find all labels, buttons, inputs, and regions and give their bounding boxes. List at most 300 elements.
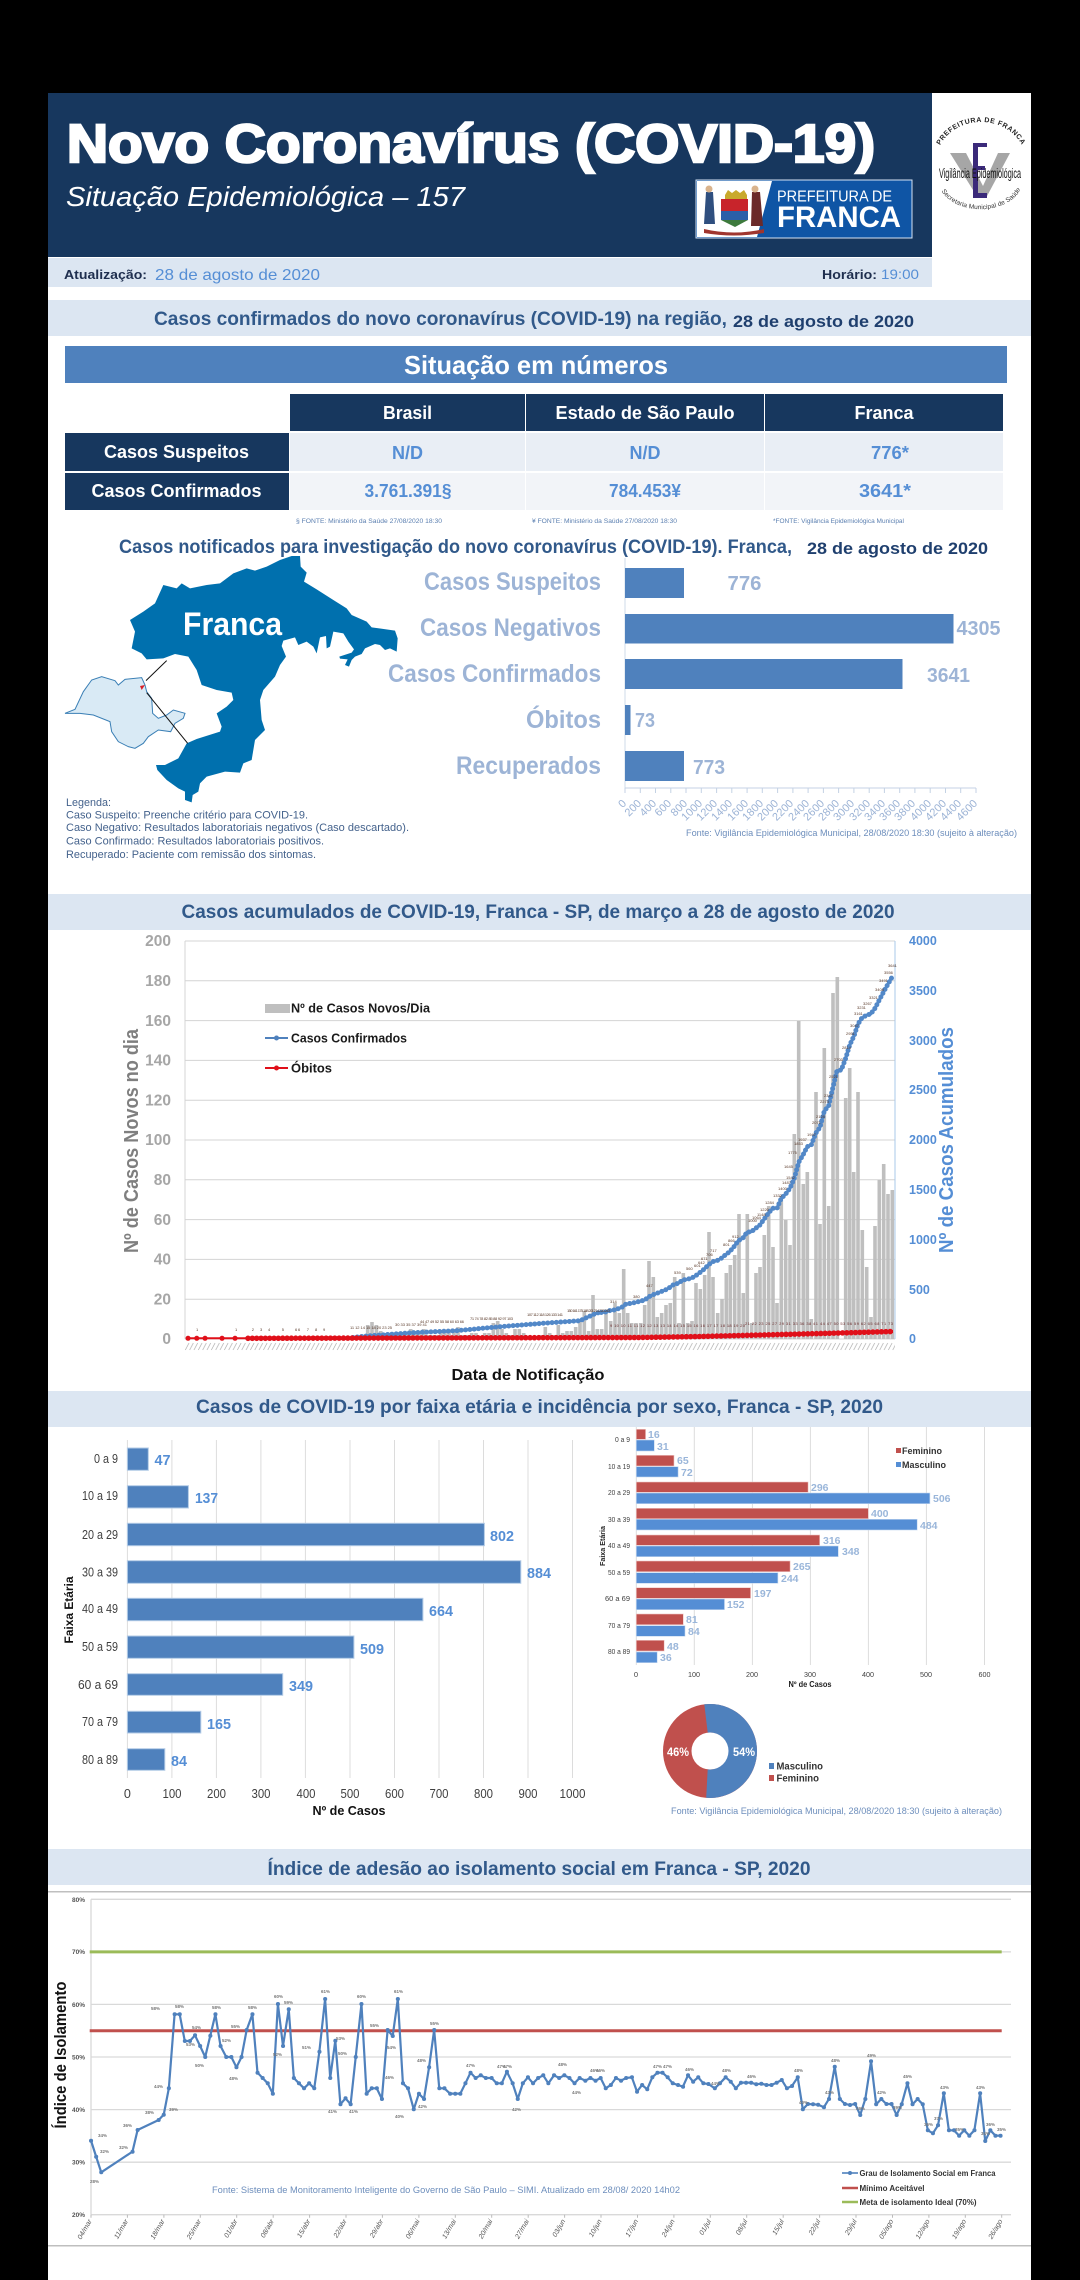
axis tick labels: 3600 [877,798,903,823]
logo: Prefeitura de Franca [696,180,912,238]
point labels: 39% [856,2106,865,2111]
x axis ticks: 500 [340,1787,360,1801]
point labels: 866 [728,1238,735,1243]
section heading: casos confirmados na região: 28 de agosto de 2020 [733,312,914,331]
x axis ticks: 800 [474,1787,493,1801]
table: situação em números: Casos Suspeitos [104,442,249,462]
section heading: isolamento social [48,1849,1031,1885]
value labels: 16 [648,1429,660,1441]
x axis date labels: 26/ago [987,2218,1004,2241]
y axis labels: 50% [72,2054,85,2062]
bar chart: casos notificados: 776 [728,573,762,595]
value labels: 36 [660,1652,672,1664]
x axis ticks: 0 [124,1787,131,1801]
point labels: 1400 [778,1186,788,1191]
left axis labels: 60 [154,1212,171,1229]
point labels [90,1989,1006,2184]
point labels: 55% [231,2024,240,2029]
table: situação em números: Brasil [383,403,432,423]
point labels: 3231 [857,1005,867,1010]
x-axis date labels [185,1342,895,1351]
value labels: 484 [920,1520,938,1532]
point labels: 47% [663,2064,672,2069]
table: situação em números: Estado de São Paulo [556,403,734,423]
chart legend: Óbitos [291,1060,332,1076]
bar chart: casos notificados: Óbitos [526,704,601,734]
axis tick labels: 1200 [694,798,720,823]
point labels: 58% [151,2006,160,2011]
donut legend: Masculino [776,1762,823,1772]
y axis labels [72,1897,85,2219]
value labels: 400 [871,1508,889,1520]
bar chart: casos notificados: Casos Negativos [420,614,601,642]
x axis date labels: 27/mai [514,2218,531,2241]
point labels: 642 [698,1260,705,1265]
right axis labels: 4000 [909,934,937,948]
table: situação em números: N/D [630,443,660,463]
point labels: 539 [674,1270,681,1275]
point labels: 71 74 78 82 85 88 92 97 103 [470,1316,514,1321]
left axis labels: 40 [154,1252,171,1268]
x axis ticks: 400 [862,1670,874,1679]
legend [896,1446,946,1470]
point labels: 3641 [888,963,898,968]
point labels: 44% [711,2081,720,2086]
right axis labels: 2000 [909,1133,937,1147]
point labels: 52% [273,2052,282,2057]
value labels: 81 [686,1614,698,1626]
point labels: 44% [154,2084,163,2089]
axis tick labels: 200 [623,798,644,819]
donut chart: incidência por sexo: 54% [733,1747,755,1759]
x axis date labels: 11/mar [113,2218,130,2240]
axis tick labels: 3800 [892,798,918,823]
point labels: 52% [222,2038,231,2043]
left axis labels: 160 [145,1013,171,1030]
point labels: 9 10 10 11 11 12 12 13 13 14 14 15 15 16 16 17 17 18 18 19 20 [610,1323,746,1328]
point labels: 601 [694,1263,701,1268]
x axis ticks: 700 [430,1787,449,1801]
category labels: 60 a 69 [78,1678,118,1692]
axis tick labels: 0 [616,798,629,810]
point labels: 44 47 49 52 55 58 60 63 66 [420,1319,465,1324]
category labels: 20 a 29 [608,1488,630,1497]
point labels: 36% [924,2122,933,2127]
point labels: 11 12 14 15 18 20 23 25 [350,1325,393,1330]
point labels: 2347 [824,1093,834,1098]
right axis labels: 1000 [909,1233,937,1247]
point labels: 3408 [875,987,885,992]
combo chart: casos acumulados [121,933,958,1384]
point labels: 43% [825,2090,834,2095]
x axis ticks: 100 [162,1787,182,1801]
category labels: 40 a 49 [82,1602,118,1616]
point labels: 560 [686,1266,693,1271]
section heading: casos acumulados [48,894,1031,930]
point labels: 1284 [765,1200,775,1205]
x axis date labels: 05/ago [878,2218,895,2241]
table sources: ¥ FONTE: Ministério da Saúde 27/08/2020 18:30 [532,518,677,525]
right axis labels: 2500 [909,1083,937,1097]
section heading: faixa etária: Casos de COVID-19 por faixa etária e incidência por sexo, Franca - SP, 2020 [196,1397,883,1418]
left axis labels: 180 [145,973,171,990]
point labels: 30 33 35 37 39 41 [395,1322,428,1327]
category labels: 20 a 29 [82,1528,118,1542]
update strip: Atualização: [64,267,147,282]
x axis date labels: 08/abr [260,2218,276,2239]
x axis date labels: 13/mai [441,2218,458,2240]
line: meta ideal 70% [90,1950,1002,1953]
point labels: 3321 [869,995,879,1000]
point labels: 48% [722,2068,731,2073]
value labels: 884 [527,1565,552,1582]
y axis labels: 60% [72,2002,85,2009]
point labels: 55% [370,2023,379,2028]
chart legend: Grau de Isolamento Social em Franca [860,2169,996,2178]
x axis date labels: 29/abr [369,2218,385,2240]
x axis ticks: 300 [804,1670,816,1679]
donut legend: Feminino [776,1774,819,1784]
point labels: 47% [497,2064,506,2069]
x axis ticks: 200 [207,1787,226,1801]
point labels: 2071 [812,1120,822,1125]
point labels: 1000 [748,1218,758,1223]
bar chart: casos notificados: Recuperados [456,752,601,780]
value labels: 165 [207,1716,231,1733]
value labels: 48 [667,1641,679,1653]
table: situação em números: 776* [871,443,909,463]
point labels: 8 [315,1327,318,1332]
heading bar: Situação em números: Situação em números [404,350,668,380]
point labels: 717 [710,1248,717,1253]
point labels: 5 [282,1327,285,1332]
section heading: casos notificados: 28 de agosto de 2020 [807,539,988,558]
point labels: 39% [893,2105,902,2110]
point labels: 1487 [782,1180,792,1185]
x axis date labels: 01/abr [223,2218,240,2239]
update strip: 19:00 [881,266,919,282]
point labels: 28% [90,2179,99,2184]
x axis date labels [77,2218,1004,2242]
point labels: 40% [799,2100,808,2105]
left axis labels: 20 [154,1292,171,1308]
point labels: 48% [417,2058,426,2063]
x axis date labels: 08/jul [735,2218,750,2236]
point labels: 1064 [752,1215,762,1220]
point labels: 2 [252,1327,255,1332]
bar chart: casos notificados: 3641 [927,665,970,687]
value labels: 84 [688,1626,700,1638]
axis tick labels: 800 [669,798,690,819]
point labels: 47% [503,2064,512,2069]
point labels: 4 [268,1327,271,1332]
subtitle: Situação Epidemiológica – 157 [66,181,466,212]
point labels: 48% [229,2076,238,2081]
legend text: Caso Confirmado: Resultados laboratoriais positivos. [66,836,324,848]
x axis title: Nº de Casos [312,1803,386,1818]
x axis ticks: 0 [634,1670,638,1679]
point labels: 51% [302,2045,311,2050]
chart legend: Meta de isolamento Ideal (70%) [860,2198,977,2207]
point labels: 7 [307,1327,310,1332]
table sources: § FONTE: Ministério da Saúde 27/08/2020 18:30 [296,518,442,525]
point labels: 1937 [798,1137,808,1142]
value labels: 47 [154,1452,170,1469]
value labels: 664 [429,1603,454,1620]
heading bar: Situação em números [65,346,1007,383]
x axis date labels: 29/jul [844,2218,859,2237]
x axis ticks: 1000 [560,1787,586,1801]
point labels: 43% [940,2085,949,2090]
donut chart: incidência por sexo: 46% [667,1747,689,1759]
chart legend: Mínimo Aceitável [860,2184,924,2193]
bars: casos novos por dia [368,977,892,1339]
right axis title: Nº de Casos Acumulados [936,1027,958,1253]
chart legend [265,1000,431,1076]
value labels: 316 [823,1535,841,1547]
point labels: 706 [706,1252,713,1257]
point labels: 35% [997,2127,1006,2132]
value labels: 72 [681,1467,693,1479]
value labels: 348 [842,1546,860,1558]
value labels: 506 [933,1493,951,1505]
chart legend [842,2169,996,2207]
legend: Feminino [902,1446,943,1456]
category labels: 50 a 59 [82,1640,118,1654]
point labels: 150 161 175 188 201 214 228 243 [567,1308,611,1313]
bar chart: casos notificados: 773 [693,757,725,779]
point labels: 1775 [788,1150,798,1155]
point labels: 54% [387,2045,396,2050]
point labels: 3161 [854,1011,864,1016]
right axis labels: 1500 [909,1183,937,1197]
logo: Prefeitura de Franca: PREFEITURA DE [777,188,892,206]
left axis labels: 80 [154,1172,171,1189]
point labels: 48% [794,2068,803,2073]
point labels: 671 [701,1256,708,1261]
point labels: 46% [747,2074,756,2079]
table: situação em números: N/D [392,443,423,463]
point labels: 42% [512,2107,521,2112]
point labels: 50% [338,2051,347,2056]
axis tick labels: 3200 [847,798,873,823]
title: Novo Coronavírus (COVID-19) [67,114,875,174]
logo: Prefeitura de Franca: FRANCA [777,201,901,234]
x axis ticks: 200 [746,1670,758,1679]
x axis date labels: 19/ago [951,2218,968,2241]
point labels: 61% [394,1989,403,1994]
point labels: 47% [653,2064,662,2069]
category labels: 10 a 19 [608,1462,630,1471]
legend text: Legenda: [66,797,111,809]
x axis date labels: 12/ago [915,2218,932,2241]
point labels: 2703 [834,1057,844,1062]
x axis date labels: 17/jun [625,2218,640,2239]
point labels: 447 [646,1283,653,1288]
point labels: 58% [175,2004,184,2009]
axis tick labels: 3000 [831,798,857,823]
point labels: 48% [831,2058,840,2063]
point labels: 2951 [846,1031,856,1036]
axis tick labels: 4000 [908,798,934,823]
value labels: 137 [195,1490,218,1507]
point labels: 37% [934,2116,943,2121]
point labels: 107 112 118 126 133 141 [527,1312,564,1317]
x axis ticks: 600 [385,1787,404,1801]
point labels: 35% [955,2127,964,2132]
value labels: 84 [171,1753,188,1770]
left axis labels: 140 [145,1052,171,1070]
point labels: 48% [558,2062,567,2067]
y axis labels: 70% [72,1949,85,1956]
point labels: 1542 [786,1175,796,1180]
line chart: isolamento social [48,1892,1031,2246]
axis tick labels: 400 [638,798,659,819]
table: situação em números: Franca [854,403,914,423]
right axis labels [909,934,937,1346]
point labels: 42% [418,2104,427,2109]
point labels: 2814 [842,1045,852,1050]
category labels: 30 a 39 [608,1515,630,1524]
point labels: 1645 [784,1164,794,1169]
point labels: 1947 [807,1132,817,1137]
right axis labels: 500 [909,1283,930,1297]
table: situação em números: 3641* [859,481,911,501]
chart legend: Nº de Casos Novos/Dia [291,1000,431,1016]
x axis title: Data de Notificação [452,1367,605,1384]
category labels: 10 a 19 [82,1489,118,1503]
left axis labels: 200 [145,933,171,950]
bar chart: casos notificados: 4305 [956,618,1000,640]
axis tick labels: 600 [653,798,674,819]
chart legend: Casos Confirmados [291,1030,407,1046]
legend text: Recuperado: Paciente com remissão dos sintomas. [66,849,316,861]
x axis date labels: 18/mar [150,2218,167,2241]
update strip [48,258,932,287]
value labels: 265 [793,1561,811,1573]
point labels: 54% [192,2025,201,2030]
bar chart: casos notificados: 73 [635,710,655,732]
table sources [296,518,905,525]
x axis ticks: 600 [978,1670,990,1679]
value labels: 197 [754,1588,772,1600]
axis tick labels: 2400 [786,798,812,823]
x axis date labels: 10/jun [588,2218,604,2239]
table: situação em números: 3.761.391§ [364,481,452,501]
category labels: 50 a 59 [608,1568,630,1577]
category labels [605,1435,630,1656]
category labels: 70 a 79 [82,1715,118,1729]
x axis date labels: 22/abr [332,2218,349,2240]
legend: Masculino [902,1460,946,1470]
value labels: 152 [727,1599,745,1611]
point labels: 380 [633,1294,640,1299]
axis tick labels: 1400 [709,798,735,823]
logo: Vigilância Epidemiológica: PREFEITURA DE FRANCA [936,117,1025,145]
bar chart: casos notificados [388,558,1000,823]
point labels: 58% [212,2005,221,2010]
axis tick labels: 3400 [862,798,888,823]
y axis labels: 30% [72,2160,85,2166]
point labels: 44% [572,2090,581,2095]
x axis date labels: 22/jul [807,2218,823,2237]
left axis title: Nº de Casos Novos no dia [121,1028,143,1253]
axis tick labels: 1000 [679,798,705,823]
axis tick labels: 2000 [755,798,781,823]
left axis labels: 100 [145,1132,171,1149]
map: Franca and São Paulo state: Franca [183,606,282,642]
x axis date labels: 01/jul [699,2218,713,2236]
point labels: 49% [867,2053,876,2058]
point labels: 1332 [773,1193,783,1198]
x axis ticks: 300 [252,1787,271,1801]
point labels: 45% [903,2074,912,2079]
y axis title: Faixa Etária [598,1525,607,1566]
point labels: 32% [119,2145,128,2150]
bar chart: faixa etária por sexo [598,1427,990,1689]
point labels: 61% [321,1989,330,1994]
x axis date labels: 15/abr [296,2218,313,2239]
point labels: 34% [981,2131,990,2136]
value labels [648,1429,951,1664]
map: Franca and São Paulo state [65,556,398,802]
section heading: faixa etária [48,1391,1031,1427]
point labels: 801 [723,1242,730,1247]
legend text [66,797,409,861]
point labels: 1 [235,1327,238,1332]
bar chart: casos notificados: Casos Confirmados [388,660,601,688]
point labels: 9 [323,1327,326,1332]
x axis ticks: 400 [296,1787,316,1801]
x axis date labels: 06/mai [405,2218,422,2240]
x axis date labels: 24/jun [661,2218,677,2239]
point labels: 912 [732,1234,739,1239]
section heading: casos acumulados: Casos acumulados de COVID-19, Franca - SP, de março a 28 de agosto de 2020 [182,902,894,923]
point labels: 21 22 23 25 27 29 31 33 36 38 41 44 47 50 53 56 59 62 65 68 71 73 [745,1321,894,1326]
donut legend [769,1762,823,1784]
point labels: 58% [248,2005,257,2010]
category labels: 80 a 89 [608,1647,630,1656]
point labels: 2521 [829,1074,839,1079]
point labels: 43% [976,2085,985,2090]
legend text: Caso Suspeito: Preenche critério para COVID-19. [66,810,308,822]
point labels: 46% [685,2067,694,2072]
point labels: 60% [274,1994,283,1999]
y axis labels: 40% [72,2107,85,2114]
category labels: 60 a 69 [605,1594,630,1603]
point labels: 60% [357,1994,366,1999]
point labels: 1220 [760,1207,770,1212]
value labels: 31 [657,1441,669,1453]
table sources: *FONTE: Vigilância Epidemiológica Municipal [773,518,905,525]
source note: isolamento: Fonte: Sistema de Monitoramento Inteligente do Governo de São Paulo – SIMI. Atualizado em 28/08/ 2020 14h02 [212,2185,680,2196]
point labels: 314 [610,1299,617,1304]
x axis date labels: 25/mar [186,2218,203,2242]
point labels: 1853 [794,1141,804,1146]
point labels: 3047 [850,1023,860,1028]
x axis ticks: 500 [920,1670,932,1679]
left axis labels: 120 [145,1092,171,1110]
value labels: 296 [811,1482,829,1494]
left axis labels: 0 [162,1331,171,1348]
point labels: 46% [596,2068,605,2073]
point labels: 1148 [757,1212,766,1217]
point labels: 55% [430,2021,439,2026]
point labels: 41% [349,2109,358,2114]
x axis date labels: 03/jun [552,2218,567,2239]
line markers [91,1999,1001,2172]
category labels: 0 a 9 [94,1452,118,1466]
